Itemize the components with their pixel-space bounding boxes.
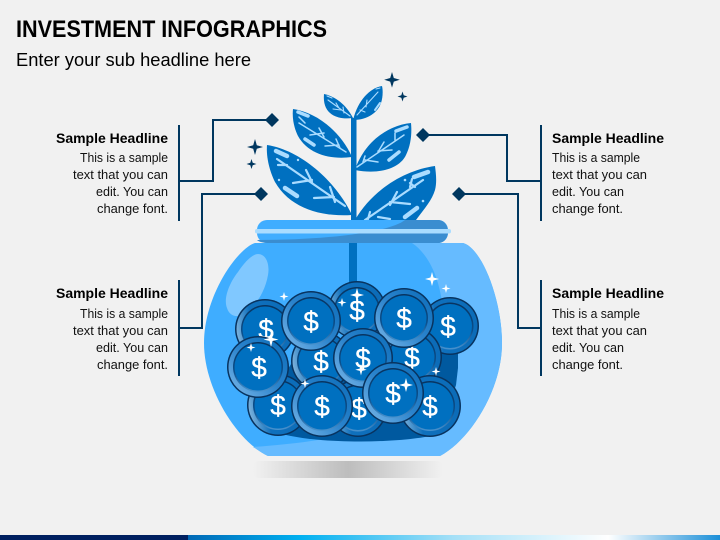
text block: bottom right: edit. You can (552, 340, 624, 355)
stem (351, 118, 356, 222)
coin: $ (422, 391, 438, 422)
text block: bottom right (552, 285, 664, 372)
coin (247, 374, 309, 436)
coin (333, 328, 393, 388)
coin (328, 281, 386, 339)
text block: bottom left (56, 285, 168, 372)
connector: top right (416, 125, 541, 221)
text block: bottom left: change font. (97, 357, 168, 372)
coin: $ (349, 295, 365, 326)
text block: top left (56, 130, 168, 216)
text block: top right: text that you can (552, 167, 647, 182)
coin: $ (404, 342, 420, 373)
text block: bottom left: edit. You can (96, 340, 168, 355)
plant (267, 86, 436, 222)
leaf: top left (324, 94, 353, 118)
coin (362, 362, 424, 424)
coin (329, 379, 387, 437)
coin (235, 299, 295, 359)
coin: $ (303, 306, 319, 337)
white sparkles (246, 272, 450, 392)
subtitle: Enter your sub headline here (16, 50, 251, 70)
jar body (204, 243, 502, 456)
text block: top left: text that you can (73, 167, 168, 182)
coin: $ (355, 343, 371, 374)
coin: $ (258, 314, 274, 345)
coin (382, 327, 442, 387)
text block: bottom left: This is a sample (80, 306, 168, 321)
text block: top right: This is a sample (552, 150, 640, 165)
text block: top right: Sample Headline (552, 130, 664, 146)
coin: $ (351, 393, 367, 424)
connector: bottom left (179, 187, 268, 376)
text block: top left: change font. (97, 201, 168, 216)
coin (374, 288, 434, 348)
connector: top left (179, 113, 279, 221)
coin: $ (270, 390, 286, 421)
text block: bottom right: change font. (552, 357, 623, 372)
text block: bottom left: text that you can (73, 323, 168, 338)
text block: top right (552, 130, 664, 216)
text block: top left: This is a sample (80, 150, 168, 165)
coin (281, 291, 341, 351)
jar glass reflection (226, 254, 269, 316)
text block: bottom right: This is a sample (552, 306, 640, 321)
connector: bottom right (452, 187, 541, 376)
text block: top right: edit. You can (552, 184, 624, 199)
jar inner stem (349, 243, 357, 288)
footer bar (0, 535, 720, 540)
coin (399, 375, 461, 437)
coin: $ (314, 391, 330, 422)
jar (204, 243, 502, 456)
text block: bottom right: text that you can (552, 323, 647, 338)
jar right highlight (253, 243, 502, 456)
coin (291, 331, 351, 391)
coin (421, 297, 479, 355)
sparkle: left of plant (246, 139, 263, 169)
lid (255, 220, 451, 243)
text block: bottom left: Sample Headline (56, 285, 168, 301)
coins (227, 281, 479, 437)
coin: $ (313, 346, 329, 377)
leaf: big right (355, 166, 436, 220)
text block: top left: edit. You can (96, 184, 168, 199)
coin pile shadow (262, 340, 458, 442)
coin: $ (251, 352, 267, 383)
sparkle: top right of plant (384, 72, 408, 102)
title: INVESTMENT INFOGRAPHICS (16, 16, 327, 43)
coin (227, 336, 289, 398)
text block: top left: Sample Headline (56, 130, 168, 146)
coin (291, 375, 353, 437)
coin: $ (440, 311, 456, 342)
jar shadow (253, 461, 443, 478)
coin: $ (385, 378, 401, 409)
text block: top right: change font. (552, 201, 623, 216)
leaf: top right (353, 86, 383, 120)
leaf: mid right (355, 123, 411, 172)
text block: bottom right: Sample Headline (552, 285, 664, 301)
coin: $ (396, 303, 412, 334)
leaf: mid left (293, 109, 352, 158)
leaf: big left (267, 145, 352, 215)
